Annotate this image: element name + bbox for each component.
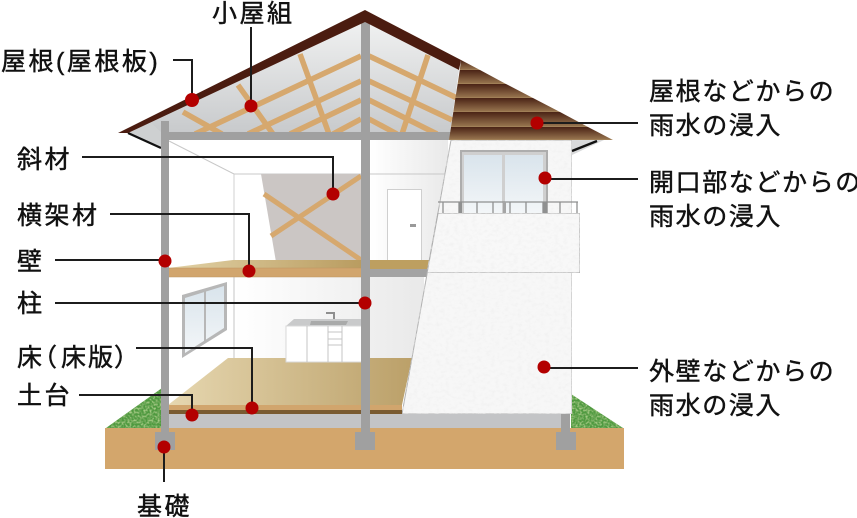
label: sill: 土台 <box>17 382 72 410</box>
label: horizontal member: 横架材 <box>17 202 100 230</box>
label: exterior wall intrusion: 雨水の浸入 <box>649 392 782 420</box>
label: roof intrusion: 屋根などからの <box>649 78 835 106</box>
label: exterior wall intrusion: 外壁などからの <box>649 358 835 386</box>
door <box>388 190 422 262</box>
upper floor interior <box>169 140 450 268</box>
label: opening intrusion: 雨水の浸入 <box>649 203 782 231</box>
label: roof: 屋根(屋根板) <box>1 48 160 76</box>
label: diagonal brace: 斜材 <box>17 146 72 174</box>
label: column: 柱 <box>17 290 45 318</box>
floor surface <box>168 358 412 405</box>
kitchen counter <box>286 313 362 362</box>
ground soil <box>105 428 624 469</box>
right eave underside <box>572 140 604 155</box>
mid floor slab <box>168 260 430 277</box>
lower floor interior <box>168 277 430 405</box>
marker dots <box>158 93 552 454</box>
labels: water intrusion <box>649 78 857 420</box>
concrete foundation slab <box>168 414 562 428</box>
labels: structural parts <box>1 0 295 518</box>
label: wall: 壁 <box>17 248 45 276</box>
balcony <box>427 202 580 273</box>
grass left <box>106 388 162 428</box>
leader lines <box>55 27 638 482</box>
label: floor: 床（床版） <box>17 344 139 372</box>
label: truss: 小屋組 <box>212 0 295 28</box>
grass right <box>571 394 623 428</box>
label: roof intrusion: 雨水の浸入 <box>649 112 782 140</box>
roof shingles <box>449 60 613 140</box>
grey wall with braces <box>261 174 361 262</box>
exterior wall <box>402 140 572 414</box>
house illustration <box>105 10 624 469</box>
side window <box>182 282 227 358</box>
columns and beams <box>155 21 576 450</box>
roof edge board <box>118 10 461 133</box>
upper window <box>460 150 548 213</box>
ground floor slab <box>168 405 402 414</box>
left eave underside <box>128 115 165 150</box>
attic with rafters <box>150 22 459 134</box>
label: opening intrusion: 開口部などからの <box>649 169 857 197</box>
